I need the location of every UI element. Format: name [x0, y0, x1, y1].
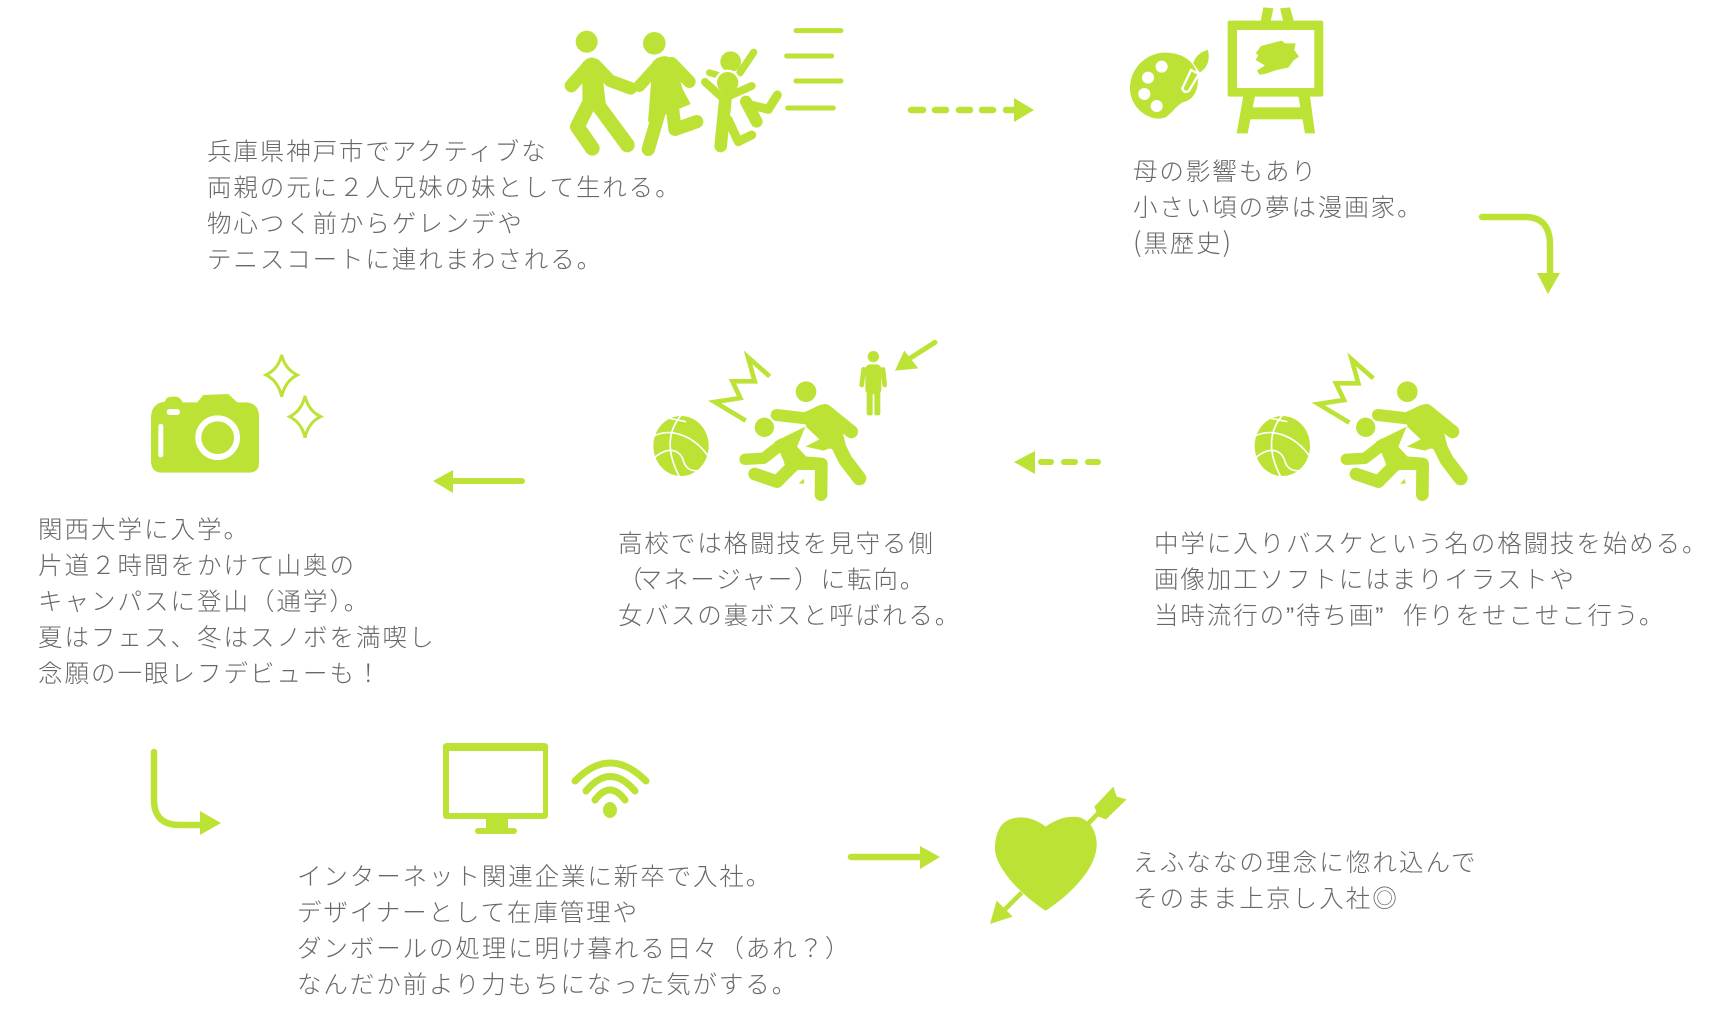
arrow: dashed left: [1014, 451, 1098, 474]
text: first job: インターネット関連企業に新卒で入社。 デザイナーとして在庫管理や ダンボールの処理に明け暮れる日々（あれ？） なんだか前より力もちになった気がする。: [297, 864, 851, 999]
arrow: left: [433, 470, 522, 493]
text: joining the company: えふななの理念に惚れ込んで そのまま上京し入社◎: [1133, 850, 1478, 913]
arrow: curved right: [154, 752, 221, 835]
arrow: pointing at onlooker: [895, 342, 935, 371]
icon: basketball players with onlooker (high school): [653, 351, 885, 495]
arrow: dashed right: [911, 98, 1034, 122]
text: childhood dream: 母の影響もあり 小さい頃の夢は漫画家。 (黒歴史): [1133, 159, 1423, 260]
icon: wifi: [575, 763, 646, 818]
icon: heart pierced by arrow: [990, 787, 1127, 924]
arrow: curved down: [1482, 217, 1560, 294]
text: university: 関西大学に入学。 片道２時間をかけて山奥の キャンパスに登山（通学）。 夏はフェス、冬はスノボを満喫し 念願の一眼レフデビューも！: [38, 517, 436, 688]
text: birth in Kobe: 兵庫県神戸市でアクティブな 両親の元に２人兄妹の妹として生れる。 物心つく前からゲレンデや テニスコートに連れまわされる。: [207, 139, 681, 274]
onlooker figure: [862, 351, 885, 415]
arrow: right: [851, 846, 940, 869]
icon: camera and sparkles: [151, 355, 321, 473]
icon: basketball players (junior high): [1255, 359, 1461, 495]
text: high school: 高校では格闘技を見守る側 （マネージャー）に転向。 女バスの裏ボスと呼ばれる。: [618, 531, 961, 630]
icon: running family: [571, 31, 841, 149]
icon: monitor: [443, 743, 548, 834]
icon: palette and easel: [1130, 7, 1323, 133]
text: junior high: 中学に入りバスケという名の格闘技を始める。 画像加工ソフトにはまりイラストや 当時流行の”待ち画” 作りをせこせこ行う。: [1154, 531, 1708, 630]
